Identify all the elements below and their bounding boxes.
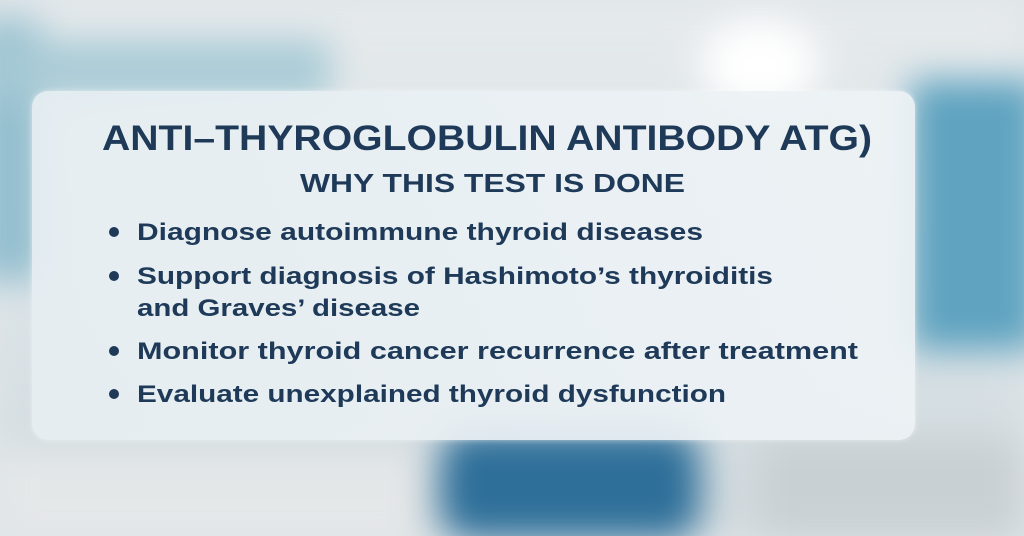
bullet list: Diagnose autoimmune thyroid diseases [137, 219, 703, 246]
bullet list: Monitor thyroid cancer recurrence after treatment [137, 338, 858, 365]
title: ANTI–THYROGLOBULIN ANTIBODY ATG) [102, 119, 872, 158]
bullet list: Evaluate unexplained thyroid dysfunction [137, 381, 726, 408]
subtitle: WHY THIS TEST IS DONE [300, 168, 685, 198]
bullet list [109, 219, 858, 408]
panel [32, 91, 915, 440]
bullet list: and Graves’ disease [137, 295, 420, 322]
bullet list: Support diagnosis of Hashimoto’s thyroiditis [137, 263, 773, 290]
